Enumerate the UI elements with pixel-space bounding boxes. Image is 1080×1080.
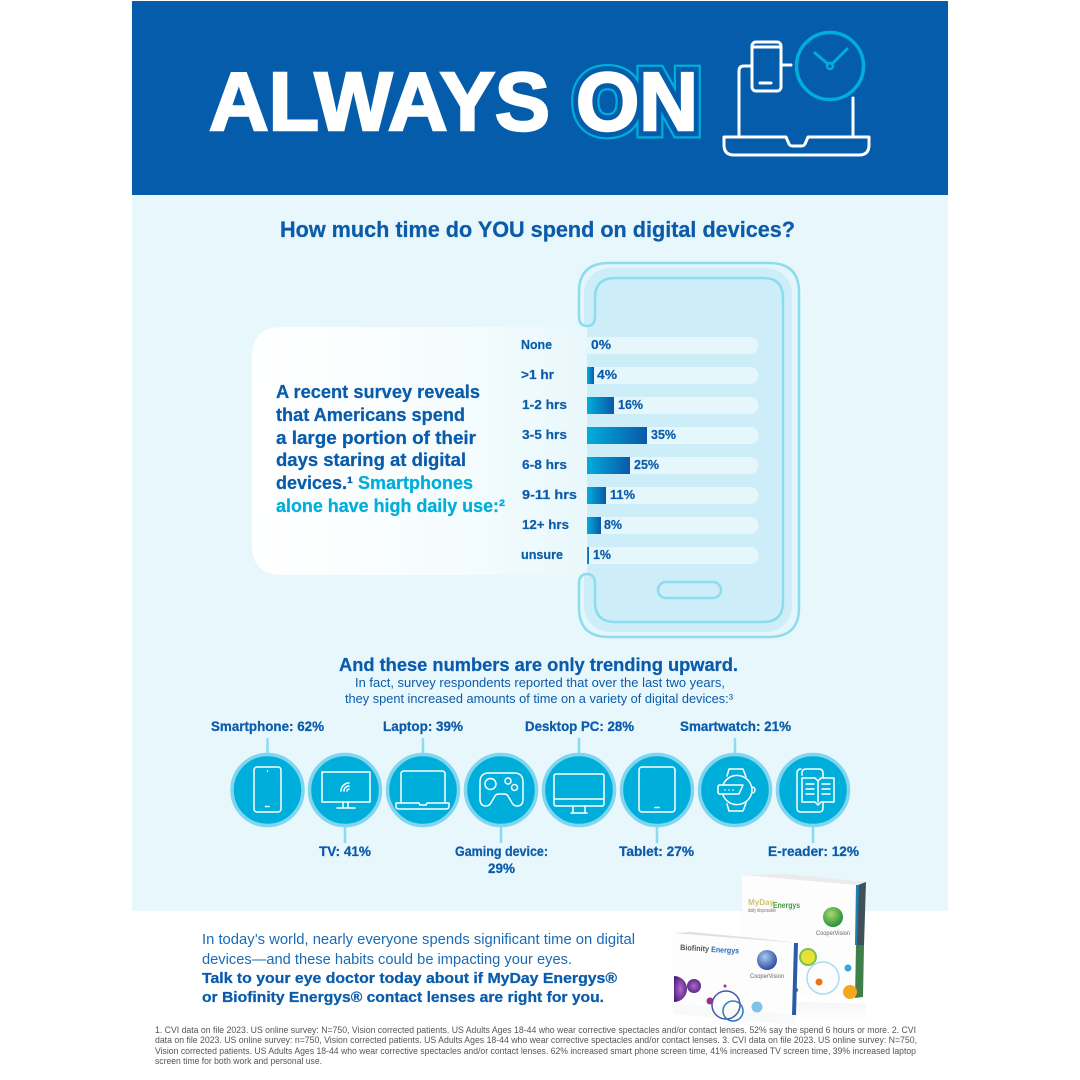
device labels: Gaming device: [455, 844, 548, 859]
trend heading: they spent increased amounts of time on a variety of digital devices:³ [345, 692, 733, 706]
footnotes: screen time for both work and personal use. [155, 1056, 322, 1066]
survey text: a large portion of their [276, 428, 476, 448]
device circles [232, 754, 848, 826]
icon: laptop [396, 771, 449, 809]
phone body fill [579, 263, 799, 637]
device labels: Tablet: 27% [619, 844, 694, 859]
box: myday energys: CooperVision [816, 931, 850, 937]
device labels: TV: 41% [319, 844, 371, 859]
call to action text: Talk to your eye doctor today about if MyDay Energys® [202, 971, 617, 987]
bar chart: daily smartphone use: >1 hr [521, 367, 554, 382]
call to action text: devices—and these habits could be impacting your eyes. [202, 952, 572, 968]
trend heading: In fact, survey respondents reported that over the last two years, [355, 676, 725, 690]
bar chart: daily smartphone use: unsure [521, 547, 563, 562]
survey text: devices.¹ Smartphones [276, 473, 473, 493]
device labels [211, 719, 859, 876]
title: always on: ON [576, 55, 698, 148]
icon: smartwatch [718, 769, 755, 811]
device labels: E-reader: 12% [768, 844, 859, 859]
call to action text [202, 932, 635, 1006]
survey text: alone have high daily use:² [276, 496, 505, 516]
device row [211, 719, 859, 876]
box: myday energys: Energys [773, 900, 800, 910]
device labels: Laptop: 39% [383, 719, 463, 734]
bar chart: daily smartphone use: 1-2 hrs [522, 397, 567, 412]
device labels: Smartwatch: 21% [680, 719, 791, 734]
bar chart: daily smartphone use [521, 337, 759, 564]
bar chart: daily smartphone use: 16% [618, 397, 643, 412]
light blue body background [132, 195, 948, 911]
icon: game controller [480, 773, 523, 806]
icon: e-reader [797, 769, 834, 812]
trend heading [339, 655, 738, 706]
product: contact lens boxes [673, 874, 866, 1025]
survey text: A recent survey reveals [276, 382, 480, 402]
box: biofinity energys [673, 932, 798, 1025]
bar chart: daily smartphone use: 8% [604, 517, 622, 532]
icon: tablet [639, 767, 675, 812]
footnotes [155, 1025, 917, 1066]
footnotes: 1. CVI data on file 2023. US online survey: N=750, Vision corrected patients. US Adults Ages 18-44 who wear corrective spectacles and/or contact lenses. 52% say the spend 6 hours or more. 2. CVI [155, 1025, 916, 1035]
bar chart: daily smartphone use: None [521, 337, 552, 352]
survey text: that Americans spend [276, 405, 465, 425]
survey text [276, 382, 505, 516]
box: biofinity energys: Biofinity [680, 943, 710, 954]
call to action text: or Biofinity Energys® contact lenses are right for you. [202, 990, 604, 1006]
device labels: Smartphone: 62% [211, 719, 324, 734]
box: myday energys: MyDay [748, 897, 774, 907]
header banner [132, 1, 948, 195]
panel: survey intro [252, 327, 587, 575]
bar chart: daily smartphone use: 6-8 hrs [522, 457, 567, 472]
device labels: 29% [488, 861, 515, 876]
title: always on: ON [576, 55, 698, 148]
footnotes: Vision corrected patients. US Adults Ages 18-44 who wear corrective spectacles and/or contact lenses. 62% increased smart phone screen time, 41% increased TV screen time, 39% increased laptop [155, 1046, 916, 1056]
icon: desktop pc [554, 774, 604, 813]
bar chart: daily smartphone use: 4% [597, 367, 617, 382]
icon: tv [322, 772, 370, 808]
icon: smartphone [254, 767, 281, 812]
heading: time on devices: How much time do YOU spend on digital devices? [280, 217, 795, 242]
bar chart: daily smartphone use: 9-11 hrs [522, 487, 577, 502]
connector lines [268, 738, 813, 843]
bar chart: daily smartphone use: 3-5 hrs [522, 427, 567, 442]
bar chart: daily smartphone use: 25% [634, 457, 659, 472]
title: always on: ALWAYS [209, 55, 550, 148]
bar chart: daily smartphone use: 12+ hrs [522, 517, 569, 532]
trend heading: And these numbers are only trending upward. [339, 655, 738, 675]
footnotes: data on file 2023. US online survey: n=750, Vision corrected patients. US Adults Ages 18-44 who wear corrective spectacles and/or contact lenses. 3. CVI data on file 2023. US online survey: N=750, [155, 1035, 917, 1045]
bar chart: daily smartphone use: 35% [651, 427, 676, 442]
call to action text: In today’s world, nearly everyone spends significant time on digital [202, 932, 635, 948]
bar chart: daily smartphone use: 11% [610, 487, 635, 502]
box: myday energys: daily disposable [748, 908, 776, 914]
box: myday energys [742, 874, 866, 1022]
bar chart: daily smartphone use: 0% [591, 337, 611, 352]
survey text: days staring at digital [276, 450, 466, 470]
box: biofinity energys: CooperVision [750, 974, 784, 980]
phone outline [579, 263, 799, 637]
bar chart: daily smartphone use: 1% [593, 547, 611, 562]
title: always on: ON [576, 55, 698, 148]
icon: laptop phone and clock [724, 32, 869, 155]
device labels: Desktop PC: 28% [525, 719, 634, 734]
box: biofinity energys: Energys [711, 945, 740, 955]
